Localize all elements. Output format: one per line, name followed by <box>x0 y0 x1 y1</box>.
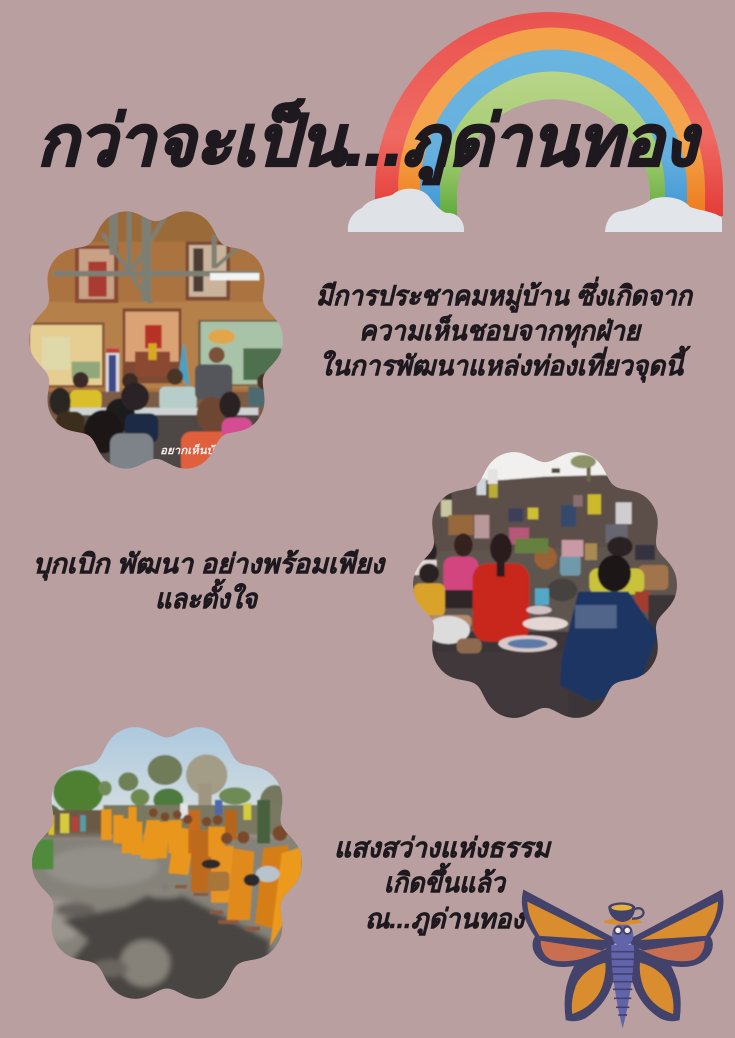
monk heads <box>149 808 303 844</box>
crowd band <box>42 808 103 838</box>
red shirt woman <box>473 563 529 642</box>
text block: village meeting <box>316 276 694 383</box>
text block: light of dharma <box>334 833 552 936</box>
ceiling beams <box>53 212 258 303</box>
wall frames <box>75 246 118 303</box>
text block: pioneering: และตั้งใจ <box>155 578 259 614</box>
photo: village meeting <box>29 211 283 469</box>
food plates <box>498 635 557 652</box>
text block: village meeting: ในการพัฒนาแหล่งท่องเที่ยวจุดนี้ <box>319 345 691 383</box>
trees <box>53 770 103 813</box>
text block: village meeting: มีการประชาคมหมู่บ้าน ซึ่งเกิดจาก <box>316 276 694 313</box>
monks row <box>101 807 195 875</box>
distant figures <box>488 469 498 484</box>
text block: village meeting: ความเห็นชอบจากทุกฝ่าย <box>359 314 642 348</box>
photo: villagers seated on rock <box>413 452 677 718</box>
text block: light of dharma: ณ...ภูด่านทอง <box>365 904 527 936</box>
table <box>70 408 258 415</box>
flags <box>106 348 119 397</box>
text block: pioneering <box>33 549 387 614</box>
green bush <box>32 839 53 869</box>
cloud right <box>605 197 722 232</box>
text block: pioneering: บุกเบิก พัฒนา อย่างพร้อมเพียง <box>33 549 387 581</box>
foreground audience <box>49 388 71 416</box>
pink blouse woman <box>443 557 478 593</box>
cloud left <box>348 189 464 232</box>
blue jacket man <box>598 555 631 592</box>
icon: moth with coffee cup <box>523 891 723 1028</box>
feet <box>175 885 260 931</box>
rainbow illustration <box>348 12 723 232</box>
seated left women <box>424 542 438 560</box>
seated people <box>48 390 264 422</box>
bystanders <box>48 815 54 835</box>
text block: light of dharma: เกิดขึ้นแล้ว <box>384 862 507 898</box>
pot and water <box>547 579 577 601</box>
mottled rock ground <box>25 835 310 1005</box>
baskets and goods <box>534 546 557 569</box>
yellow shirt man <box>607 537 633 557</box>
posters <box>27 322 105 388</box>
photo: monks receiving alms <box>25 720 310 1005</box>
watermark caption on photo: อยากเห็นบ้ <box>160 443 217 457</box>
title: กว่าจะเป็น...ภูด่านทอง <box>37 99 702 185</box>
tree and sign <box>587 462 591 482</box>
text block: light of dharma: แสงสว่างแห่งธรรม <box>334 833 552 863</box>
